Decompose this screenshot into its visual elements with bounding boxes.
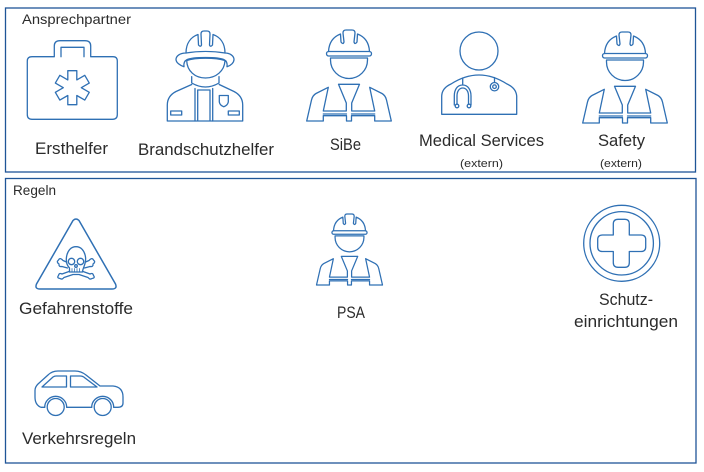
heading: Ansprechpartner: Ansprechpartner [22,12,132,27]
label: PSA: PSA [337,303,366,322]
label: extern: (extern) [600,158,642,170]
icon: first aid kit [27,41,117,119]
heading: Regeln: Regeln [13,183,56,198]
panel: Regeln [6,178,696,463]
icon: SiBe worker [307,30,391,121]
label: Ersthelfer: Ersthelfer [35,139,108,158]
label: Gefahrenstoffe: Gefahrenstoffe [19,299,133,318]
icon: Safety worker [583,32,667,123]
label: Safety: Safety [598,131,645,150]
label: Medical Services: Medical Services [419,131,544,150]
icon: hazard triangle with skull [36,219,116,289]
icon: PSA worker [317,214,382,285]
label: Schutz-: Schutz- [599,290,653,309]
label: Brandschutzhelfer: Brandschutzhelfer [138,140,274,159]
icon: medical doctor [442,32,517,114]
label: extern: (extern) [460,158,503,170]
icon: firefighter [167,31,243,121]
panel: Ansprechpartner [6,8,696,172]
icon: safety cross in circle [584,205,660,281]
label: SiBe: SiBe [330,135,361,154]
label: einrichtungen: einrichtungen [574,312,678,331]
label: Verkehrsregeln: Verkehrsregeln [22,429,136,448]
icon: car [35,371,123,416]
